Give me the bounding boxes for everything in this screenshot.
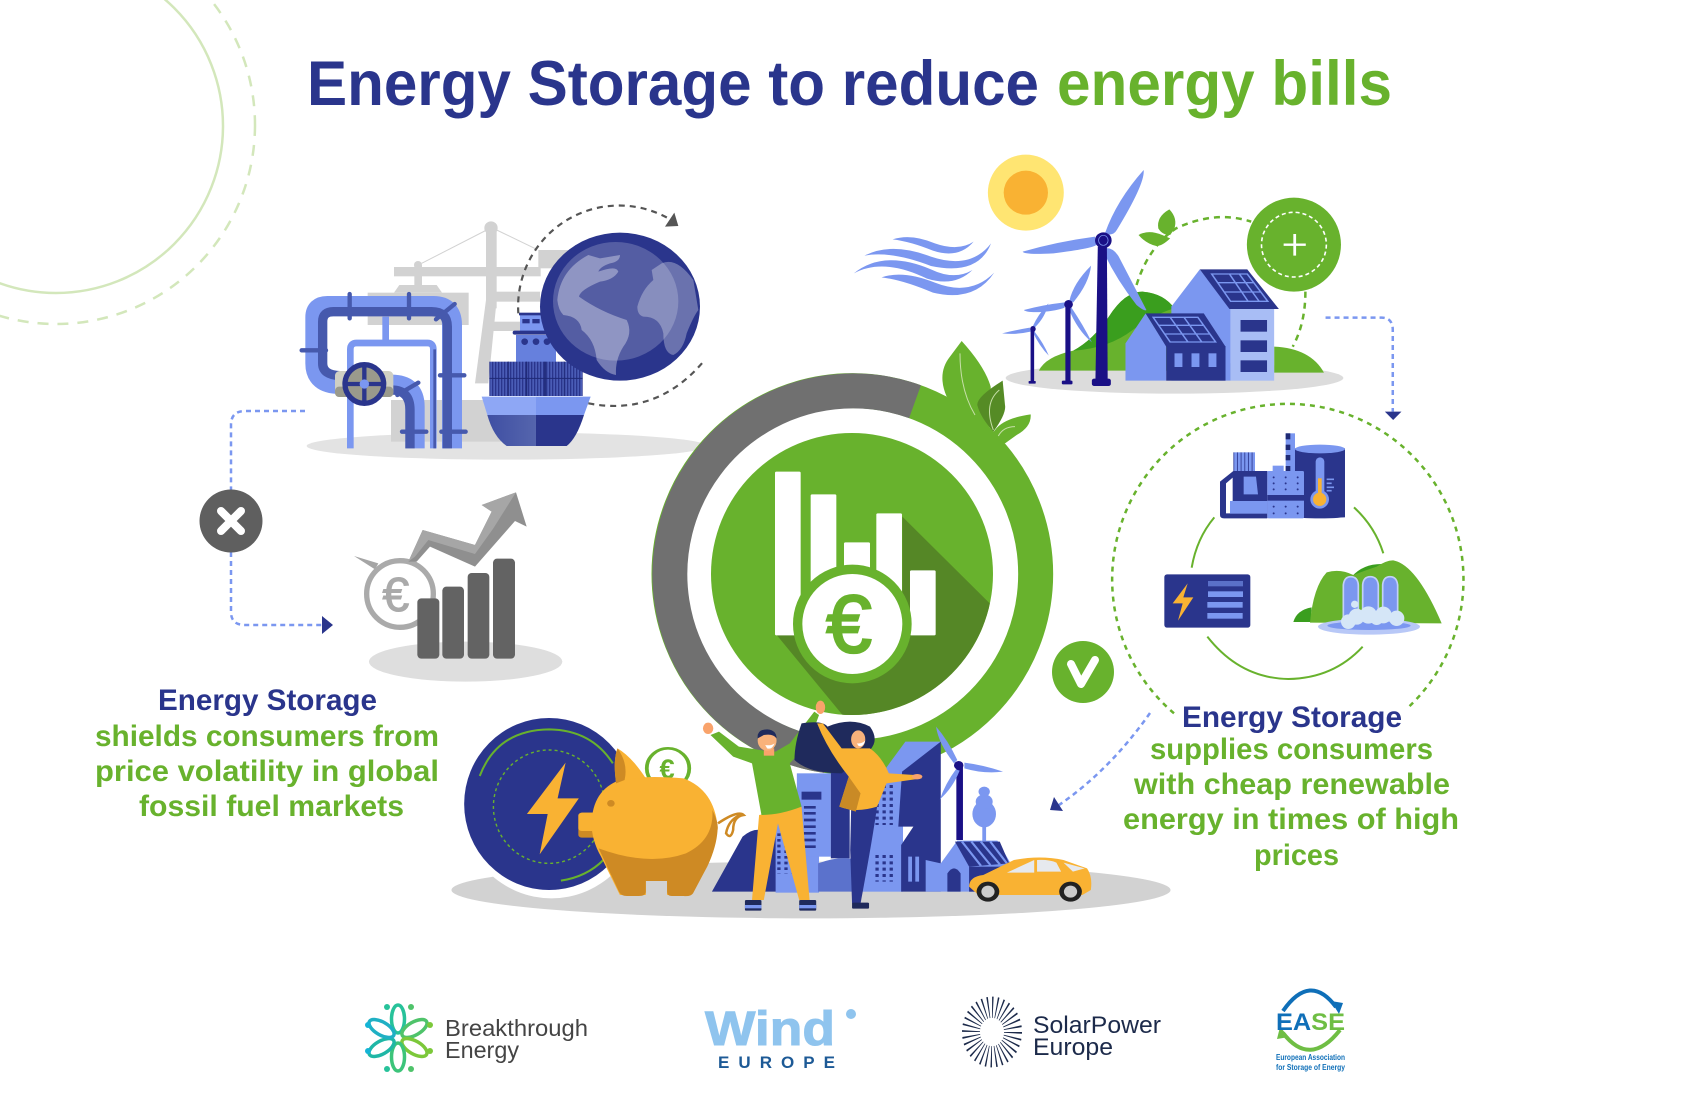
battery coin disc xyxy=(462,718,641,898)
text block: left message: fossil fuel markets xyxy=(139,790,404,823)
text block: right message xyxy=(1123,701,1459,872)
arrow: storage to consumers xyxy=(1050,713,1150,811)
text block: right message: energy in times of high xyxy=(1123,803,1459,836)
large pipes xyxy=(315,306,452,448)
text block: right message: with cheap renewable xyxy=(1133,768,1450,801)
central icon: savings ring xyxy=(669,341,1040,763)
globe xyxy=(540,233,700,381)
car xyxy=(969,857,1091,902)
woman xyxy=(794,722,922,909)
cycle arcs xyxy=(1192,507,1383,679)
euro coin xyxy=(798,569,907,679)
port crane xyxy=(368,221,568,442)
logo: SolarPower Europe: SolarPower xyxy=(1033,1012,1161,1039)
logo: EASE: European Association xyxy=(1276,1053,1345,1062)
scene: renewable generation xyxy=(854,155,1401,420)
text block: right message: prices xyxy=(1254,839,1339,872)
valve wheel xyxy=(335,365,393,403)
euro coin: € xyxy=(826,579,872,670)
sun xyxy=(988,155,1064,231)
falling bars xyxy=(775,472,936,635)
scene: global fossil fuel trade xyxy=(302,206,707,682)
rotating dashed arrow around globe xyxy=(518,206,703,406)
city skyline xyxy=(712,742,941,893)
decorative circles: top left xyxy=(0,0,255,324)
rising price chart: € xyxy=(382,568,409,622)
ring: green savings segment xyxy=(669,391,1036,757)
icon: check badge xyxy=(1052,641,1114,703)
green hills xyxy=(1039,292,1324,373)
logo: EASE: for Storage of Energy xyxy=(1276,1063,1345,1072)
logo: SolarPower Europe: Europe xyxy=(1033,1034,1113,1061)
logo: Breakthrough Energy: Breakthrough xyxy=(445,1015,588,1041)
wind lines xyxy=(854,237,994,295)
house xyxy=(926,841,1011,892)
green dashed circle xyxy=(1112,404,1463,713)
connector: fossil markets to price rise with X xyxy=(200,411,333,634)
green disc with long shadow xyxy=(711,433,993,715)
man xyxy=(703,701,825,911)
logo: Breakthrough Energy xyxy=(365,1004,588,1072)
rising price chart xyxy=(354,492,562,682)
thin pipe loop xyxy=(350,317,435,448)
logo: WindEurope: Wind xyxy=(705,1003,835,1056)
logo: WindEurope: EUROPE xyxy=(718,1053,835,1072)
text block: left message xyxy=(95,684,439,823)
wind turbines xyxy=(1002,170,1146,386)
logo: EASE xyxy=(1276,990,1345,1072)
icon: battery card xyxy=(1164,574,1250,628)
scene: consumers and savings xyxy=(451,701,1171,918)
logo: SolarPower Europe xyxy=(971,1007,1161,1061)
title: Energy Storage to reduce xyxy=(307,49,1039,119)
piggy bank: € xyxy=(659,753,675,784)
text block: left message: price volatility in global xyxy=(95,755,439,788)
houses with solar panels xyxy=(1125,269,1279,381)
ring: grey segment xyxy=(670,391,915,756)
ground shadow xyxy=(307,432,707,460)
scene: storage technologies circle xyxy=(1112,404,1463,713)
icon: thermal storage factory xyxy=(1220,433,1345,518)
icon: pumped hydro waterfall xyxy=(1293,560,1442,635)
logo: WindEurope xyxy=(705,1003,856,1072)
text block: left message: Energy Storage xyxy=(158,684,377,717)
text block: left message: shields consumers from xyxy=(95,720,439,753)
text block: right message: supplies consumers xyxy=(1150,733,1433,766)
logo: Breakthrough Energy: Energy xyxy=(445,1037,520,1063)
text block: right message: Energy Storage xyxy=(1182,701,1402,734)
title: energy bills xyxy=(1057,49,1392,119)
ground shadow xyxy=(1006,362,1343,394)
ground shadow xyxy=(451,862,1171,918)
container ship xyxy=(482,313,591,446)
piggy bank xyxy=(578,748,744,896)
logo: EASE: EASE xyxy=(1276,1009,1345,1036)
small turbine and tree xyxy=(936,727,1003,843)
arrow: blue dashed to storage circle xyxy=(1326,318,1401,420)
plus badge and green dashed loop xyxy=(1137,198,1341,347)
pipe clamps xyxy=(302,294,466,432)
icon: cross badge xyxy=(200,490,262,552)
leaves on ring xyxy=(942,341,1031,443)
